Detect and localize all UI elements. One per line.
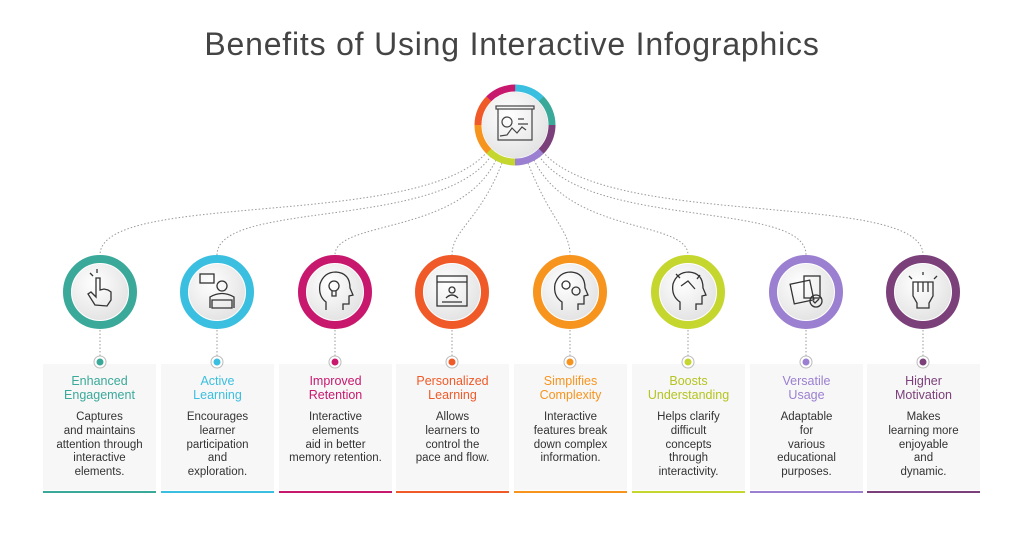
panel: Simplifies Complexity: down complex — [534, 439, 607, 451]
panel: Simplifies Complexity: information. — [540, 452, 601, 464]
panel: Improved Retention: Interactive — [309, 411, 362, 423]
panel: Versatile Usage — [750, 364, 863, 490]
panel: Higher Motivation: learning more — [888, 425, 959, 437]
panel: Personalized Learning: Personalized — [416, 374, 489, 388]
panel: Versatile Usage: Versatile — [783, 374, 830, 388]
panel: Personalized Learning: pace and flow. — [416, 452, 489, 464]
panel: Simplifies Complexity: Interactive — [544, 411, 597, 423]
panel: Boosts Understanding: difficult — [671, 425, 706, 437]
panel: Versatile Usage: Adaptable — [781, 411, 832, 423]
panel: Active Learning: participation — [186, 439, 248, 451]
panel: Simplifies Complexity: Complexity — [540, 388, 601, 402]
panel: Active Learning: learner — [200, 425, 235, 437]
icon circles — [67, 259, 956, 325]
panel: Improved Retention: elements — [312, 425, 359, 437]
panel: Higher Motivation: Makes — [907, 411, 940, 423]
panel: Higher Motivation: dynamic. — [900, 466, 947, 478]
panel: Improved Retention: memory retention. — [289, 452, 382, 464]
central icon — [463, 73, 567, 177]
panel: Versatile Usage: various — [788, 439, 825, 451]
panel: Simplifies Complexity: features break — [534, 425, 607, 437]
panel: Active Learning: Active — [200, 374, 235, 388]
panel: Enhanced Engagement: Engagement — [64, 388, 135, 402]
panel: Higher Motivation: Motivation — [895, 388, 952, 402]
panel: Boosts Understanding: Understanding — [648, 388, 729, 402]
panel: Active Learning: Encourages — [187, 411, 248, 423]
panel: Enhanced Engagement: Captures — [76, 411, 123, 423]
panel: Improved Retention: Retention — [309, 388, 362, 402]
panel: Boosts Understanding: interactivity. — [659, 466, 718, 478]
panel: Higher Motivation — [867, 364, 980, 490]
panel: Boosts Understanding: through — [669, 452, 708, 464]
panel: Enhanced Engagement: Enhanced — [71, 374, 128, 388]
panel: Active Learning: exploration. — [188, 466, 247, 478]
panel: Personalized Learning: learners to — [425, 425, 480, 437]
panel: Enhanced Engagement: and maintains — [64, 425, 135, 437]
panel: Personalized Learning: Learning — [428, 388, 477, 402]
panel: Personalized Learning: Allows — [436, 411, 469, 423]
panel: Simplifies Complexity: Simplifies — [544, 374, 597, 388]
panel: Improved Retention: aid in better — [305, 439, 366, 451]
panel: Improved Retention: Improved — [309, 374, 362, 388]
panel: Higher Motivation: and — [914, 452, 933, 464]
panel: Active Learning — [161, 364, 274, 490]
panel: Boosts Understanding: concepts — [665, 439, 712, 451]
panel: Active Learning: and — [208, 452, 227, 464]
panel: Enhanced Engagement — [43, 364, 156, 490]
panel: Enhanced Engagement: elements. — [75, 466, 124, 478]
panel: Boosts Understanding: Helps clarify — [657, 411, 720, 423]
panel: Boosts Understanding: Boosts — [669, 374, 708, 388]
panel: Personalized Learning: control the — [426, 439, 479, 451]
panel: Boosts Understanding — [632, 364, 745, 490]
panel: Simplifies Complexity — [514, 364, 627, 490]
panel: Versatile Usage: educational — [777, 452, 836, 464]
panel: Higher Motivation: Higher — [905, 374, 942, 388]
panel: Higher Motivation: enjoyable — [899, 439, 948, 451]
title: Benefits of Using Interactive Infographics — [204, 26, 820, 62]
panel: Active Learning: Learning — [193, 388, 242, 402]
panel: Personalized Learning — [396, 364, 509, 490]
panel: Enhanced Engagement: interactive — [73, 452, 126, 464]
panel: Versatile Usage: Usage — [788, 388, 825, 402]
panel: Enhanced Engagement: attention through — [56, 439, 143, 451]
panel: Versatile Usage: for — [800, 425, 813, 437]
panel: Improved Retention — [279, 364, 392, 490]
panel: Versatile Usage: purposes. — [781, 466, 832, 478]
